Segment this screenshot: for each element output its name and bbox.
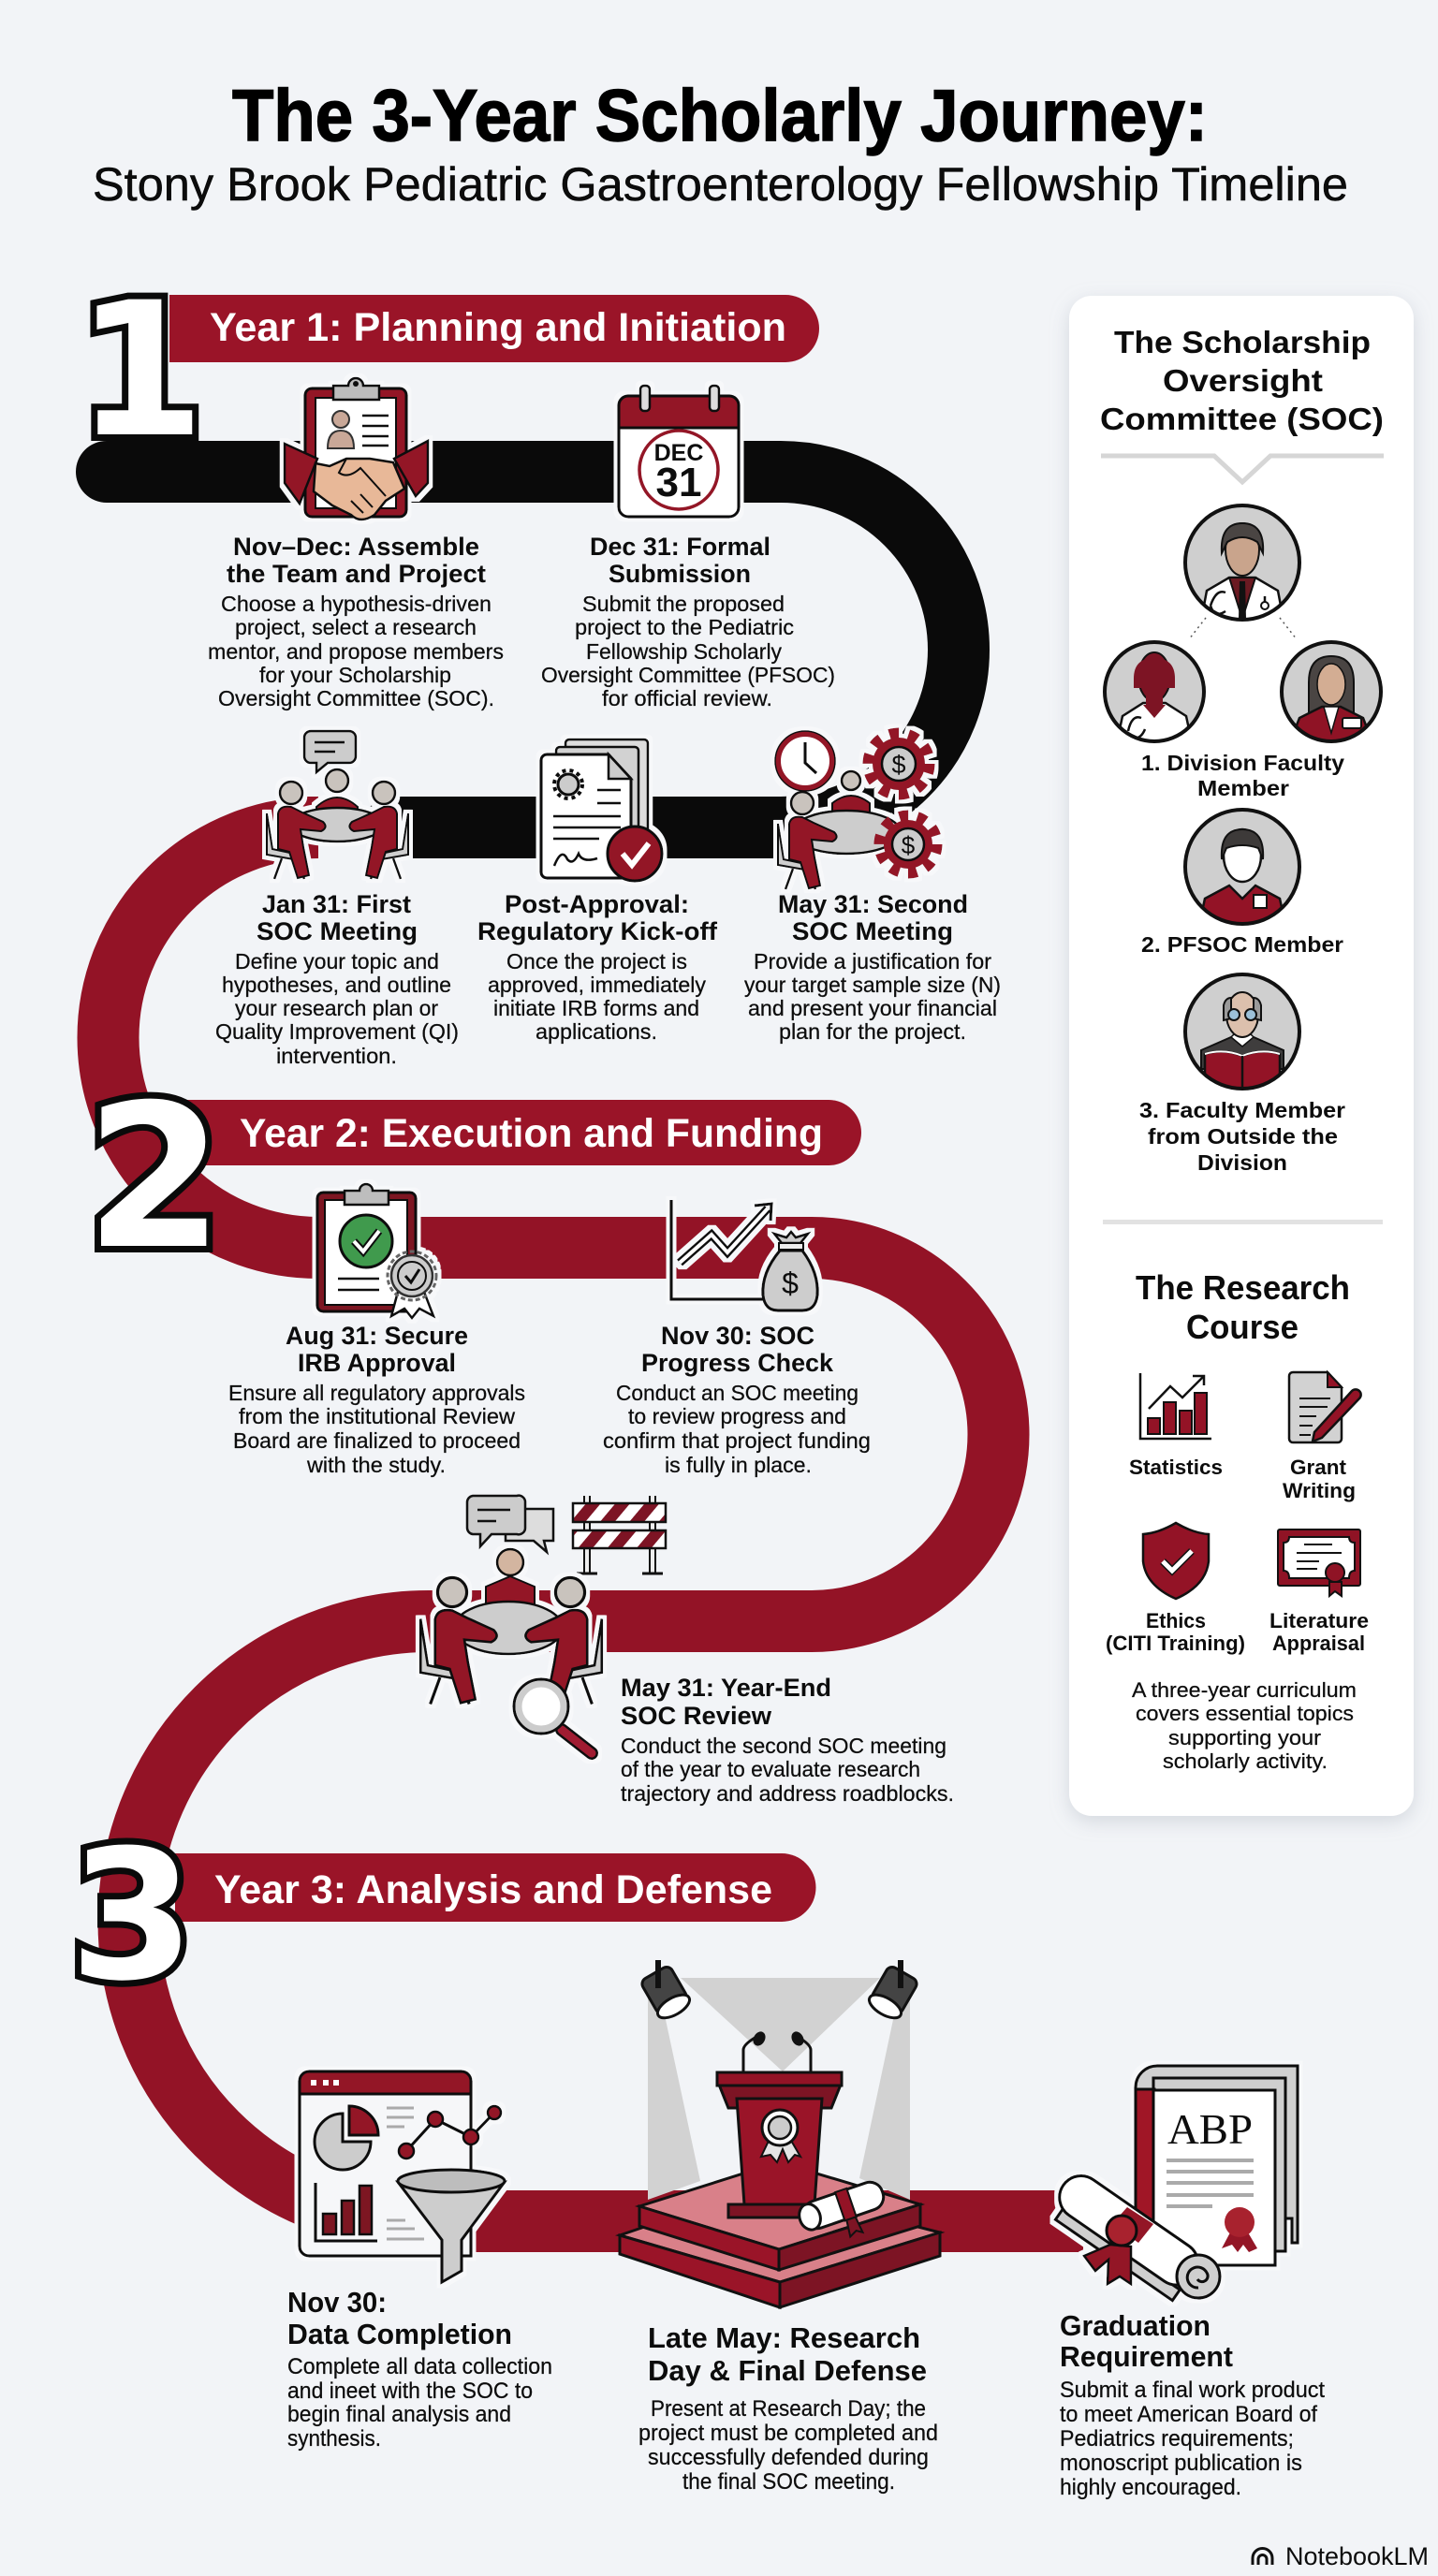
text: Nov 30 data completion: and ineet with the SOC to: [287, 2378, 533, 2404]
text: research course description: [1132, 1678, 1357, 1773]
icon: data dashboard and funnel: [300, 2071, 505, 2282]
year 2 number: 2: [85, 1061, 224, 1293]
icon: ethics shield: [1143, 1523, 1209, 1599]
icon: calendar Dec 31: 31: [656, 460, 701, 505]
text: May 31 year-end SOC review: May 31: Year-End: [621, 1674, 831, 1702]
text: Nov 30 data completion: Nov 30:: [287, 2286, 387, 2319]
label: division faculty member: [1141, 751, 1344, 800]
icon: spotlights: [639, 1960, 919, 2200]
label: outside faculty member: [1139, 1098, 1345, 1175]
text: Aug 31 secure IRB approval: Ensure all regulatory approvals: [228, 1381, 525, 1405]
text: Jan 31 first SOC meeting: Quality Improvement (QI): [215, 1019, 459, 1044]
icon: calendar Dec 31: DEC: [654, 440, 703, 466]
text: late May research day and final defense: [638, 2321, 938, 2495]
text: post-approval regulatory kick-off: applications.: [536, 1019, 657, 1044]
text: Nov 30 data completion: Complete all data collection: [287, 2354, 552, 2379]
year 2 banner: [183, 1100, 861, 1165]
text: Nov-Dec assemble the team: Choose a hypothesis-driven: [221, 592, 492, 616]
label: ethics citi training: Ethics: [1146, 1609, 1206, 1632]
icon: second SOC meeting with clock and gears: $: [902, 831, 916, 859]
text: post-approval regulatory kick-off: initiate IRB forms and: [493, 996, 699, 1020]
text: Nov-Dec assemble the team: Oversight Committee (SOC).: [218, 686, 494, 710]
text: Jan 31 first SOC meeting: [215, 890, 459, 1068]
icon: statistics: [1140, 1373, 1211, 1439]
text: Nov 30 data completion: Data Completion: [287, 2318, 512, 2350]
text: Nov-Dec assemble the team: mentor, and propose members: [208, 639, 504, 664]
text: May 31 year-end SOC review: trajectory and address roadblocks.: [621, 1781, 954, 1806]
timeline road: red path through years 1 to 3: [109, 827, 1083, 2221]
year 3 banner: Year 3: Analysis and Defense: [214, 1867, 772, 1912]
text: Jan 31 first SOC meeting: SOC Meeting: [257, 917, 418, 945]
text: Aug 31 secure IRB approval: with the study.: [306, 1453, 446, 1477]
text: research course description: supporting your: [1168, 1726, 1321, 1749]
panel: scholarship oversight committee and research course: [1069, 296, 1414, 1816]
text: graduation requirement: Submit a final work product: [1060, 2378, 1325, 2403]
text: May 31 year-end SOC review: [621, 1674, 954, 1806]
avatar: division faculty doctor: [1105, 642, 1204, 742]
icon: second SOC meeting with clock and gears: $: [891, 751, 906, 779]
avatar: outside faculty with book: [1185, 974, 1299, 1090]
label: grant writing: Writing: [1283, 1479, 1356, 1502]
year 1 banner: Year 1: Planning and Initiation: [210, 305, 786, 350]
text: post-approval regulatory kick-off: Once the project is: [506, 949, 687, 973]
heading: scholarship oversight committee: The Scholarship: [1114, 325, 1371, 359]
text: Dec 31 formal submission: project to the Pediatric: [575, 615, 794, 639]
text: Nov-Dec assemble the team: [208, 533, 504, 710]
text: Nov 30 data completion: synthesis.: [287, 2426, 381, 2452]
text: Nov 30 SOC progress check: [603, 1322, 871, 1477]
text: Dec 31 formal submission: Fellowship Scholarly: [586, 639, 782, 664]
text: graduation requirement: Pediatrics requirements;: [1060, 2426, 1294, 2452]
text: Nov 30 SOC progress check: Nov 30: SOC: [661, 1322, 814, 1350]
icon: approved document: [541, 739, 662, 881]
icon: year-end meeting with magnifier: [420, 1549, 602, 1753]
text: post-approval regulatory kick-off: [477, 890, 718, 1044]
icon: clipboard and handshake: [285, 378, 428, 520]
label: PFSOC member: 2. PFSOC Member: [1141, 932, 1343, 957]
text: Jan 31 first SOC meeting: your research plan or: [235, 996, 438, 1020]
heading: research course: The Research: [1136, 1268, 1350, 1307]
heading: research course: [1136, 1268, 1350, 1346]
year 1 banner: [169, 295, 819, 362]
avatar: PFSOC member: [1185, 810, 1299, 925]
text: May 31 second SOC meeting: SOC Meeting: [792, 917, 953, 945]
text: late May research day and final defense: Day & Final Defense: [648, 2354, 927, 2387]
text: late May research day and final defense: successfully defended during: [648, 2445, 929, 2470]
icon: ABP book and scroll: ABP: [1167, 2105, 1253, 2153]
year 1 number: 1: [76, 262, 205, 478]
timeline road: year 1 black segment: [107, 472, 959, 827]
text: Jan 31 first SOC meeting: Define your topic and: [235, 949, 439, 973]
year 2 banner: Year 2: Execution and Funding: [240, 1111, 823, 1156]
text: Nov 30 SOC progress check: to review progress and: [628, 1404, 846, 1428]
text: Dec 31 formal submission: Dec 31: Formal: [590, 533, 770, 561]
label: ethics citi training: (CITI Training): [1106, 1632, 1245, 1655]
label: outside faculty member: from Outside the: [1148, 1124, 1338, 1149]
text: Dec 31 formal submission: Submission: [609, 560, 751, 588]
text: late May research day and final defense: project must be completed and: [638, 2421, 938, 2446]
text: Dec 31 formal submission: Submit the proposed: [582, 592, 785, 616]
icon: calendar Dec 31: [619, 386, 739, 517]
label: division faculty member: Member: [1197, 776, 1289, 800]
heading: scholarship oversight committee: [1100, 325, 1384, 436]
text: Aug 31 secure IRB approval: Aug 31: Secure: [286, 1322, 468, 1350]
subtitle: Stony Brook Pediatric Gastroenterology Fellowship Timeline: [93, 158, 1348, 211]
NotebookLM logo: NotebookLM: [1285, 2542, 1429, 2570]
title: The 3-Year Scholarly Journey:: [232, 74, 1208, 156]
text: May 31 second SOC meeting: plan for the project.: [779, 1019, 966, 1044]
heading: scholarship oversight committee: Committee (SOC): [1100, 402, 1384, 436]
text: May 31 second SOC meeting: [744, 890, 1001, 1044]
year 3 number: 3: [69, 1812, 195, 2021]
text: graduation requirement: Graduation: [1060, 2309, 1211, 2342]
text: graduation requirement: [1060, 2309, 1325, 2500]
text: Dec 31 formal submission: [541, 533, 835, 710]
text: Aug 31 secure IRB approval: IRB Approval: [298, 1349, 456, 1377]
text: Nov-Dec assemble the team: for your Scholarship: [259, 663, 451, 687]
text: post-approval regulatory kick-off: Post-Approval:: [505, 890, 689, 918]
icon: first SOC meeting: [267, 731, 408, 879]
heading: research course: Course: [1186, 1308, 1299, 1346]
icon: second SOC meeting with clock and gears: [775, 731, 936, 889]
text: Aug 31 secure IRB approval: from the institutional Review: [239, 1404, 515, 1428]
text: Nov 30 data completion: [287, 2286, 552, 2452]
icon: IRB approval clipboard: [317, 1184, 436, 1318]
text: Jan 31 first SOC meeting: intervention.: [276, 1044, 397, 1068]
text: Nov 30 data completion: begin final analysis and: [287, 2402, 511, 2427]
icon: speech bubbles: [467, 1496, 553, 1552]
text: Nov-Dec assemble the team: project, select a research: [235, 615, 477, 639]
text: post-approval regulatory kick-off: Regulatory Kick-off: [477, 917, 718, 945]
text: Aug 31 secure IRB approval: [228, 1322, 525, 1477]
text: late May research day and final defense: the final SOC meeting.: [682, 2469, 895, 2495]
icon: growth chart and money bag: [671, 1200, 817, 1310]
text: May 31 second SOC meeting: your target sample size (N): [744, 973, 1001, 997]
label: grant writing: Grant: [1290, 1456, 1347, 1479]
label: ethics citi training: [1106, 1609, 1245, 1655]
text: May 31 year-end SOC review: Conduct the second SOC meeting: [621, 1734, 946, 1758]
label: outside faculty member: 3. Faculty Member: [1139, 1098, 1345, 1122]
year 3 banner: [175, 1853, 816, 1922]
label: literature appraisal: [1269, 1609, 1369, 1655]
label: statistics: Statistics: [1129, 1456, 1223, 1479]
text: Nov-Dec assemble the team: Nov–Dec: Assemble: [233, 533, 479, 561]
icon: ABP book and scroll: [1045, 2066, 1298, 2303]
text: Nov 30 SOC progress check: is fully in place.: [665, 1453, 812, 1477]
text: May 31 second SOC meeting: and present your financial: [748, 996, 997, 1020]
icon: podium on stage with diploma: [620, 2029, 940, 2307]
label: literature appraisal: Appraisal: [1272, 1632, 1365, 1655]
text: late May research day and final defense: Present at Research Day; the: [651, 2396, 926, 2422]
text: Dec 31 formal submission: for official review.: [602, 686, 772, 710]
text: graduation requirement: to meet American Board of: [1060, 2402, 1317, 2427]
text: May 31 year-end SOC review: of the year to evaluate research: [621, 1757, 920, 1781]
text: graduation requirement: monoscript publication is: [1060, 2451, 1302, 2476]
text: Nov 30 SOC progress check: Progress Check: [641, 1349, 834, 1377]
text: Nov 30 SOC progress check: confirm that project funding: [603, 1428, 871, 1453]
text: Nov 30 SOC progress check: Conduct an SOC meeting: [616, 1381, 858, 1405]
avatar: lead doctor: [1185, 505, 1299, 621]
label: literature appraisal: Literature: [1269, 1609, 1369, 1632]
label: outside faculty member: Division: [1197, 1150, 1287, 1175]
text: post-approval regulatory kick-off: approved, immediately: [488, 973, 706, 997]
label: grant writing: [1283, 1456, 1356, 1502]
text: graduation requirement: Requirement: [1060, 2340, 1233, 2373]
avatar: division faculty woman: [1282, 642, 1381, 742]
text: Jan 31 first SOC meeting: hypotheses, and outline: [222, 973, 451, 997]
icon: grant writing: [1289, 1372, 1361, 1442]
text: May 31 year-end SOC review: SOC Review: [621, 1702, 772, 1730]
text: May 31 second SOC meeting: May 31: Second: [778, 890, 968, 918]
text: late May research day and final defense: Late May: Research: [648, 2321, 920, 2354]
icon: roadblock barrier: [573, 1496, 666, 1573]
text: May 31 second SOC meeting: Provide a justification for: [754, 949, 991, 973]
text: research course description: covers essential topics: [1136, 1702, 1354, 1725]
text: Aug 31 secure IRB approval: Board are finalized to proceed: [233, 1428, 521, 1453]
text: graduation requirement: highly encouraged.: [1060, 2475, 1241, 2500]
icon: growth chart and money bag: $: [782, 1266, 799, 1300]
text: Jan 31 first SOC meeting: Jan 31: First: [262, 890, 411, 918]
text: Nov-Dec assemble the team: the Team and Project: [227, 560, 486, 588]
label: division faculty member: 1. Division Faculty: [1141, 751, 1344, 775]
text: research course description: A three-year curriculum: [1132, 1678, 1357, 1702]
icon: literature appraisal certificate: [1278, 1530, 1360, 1596]
text: research course description: scholarly activity.: [1163, 1749, 1328, 1773]
heading: scholarship oversight committee: Oversight: [1163, 363, 1323, 398]
text: Dec 31 formal submission: Oversight Committee (PFSOC): [541, 663, 835, 687]
